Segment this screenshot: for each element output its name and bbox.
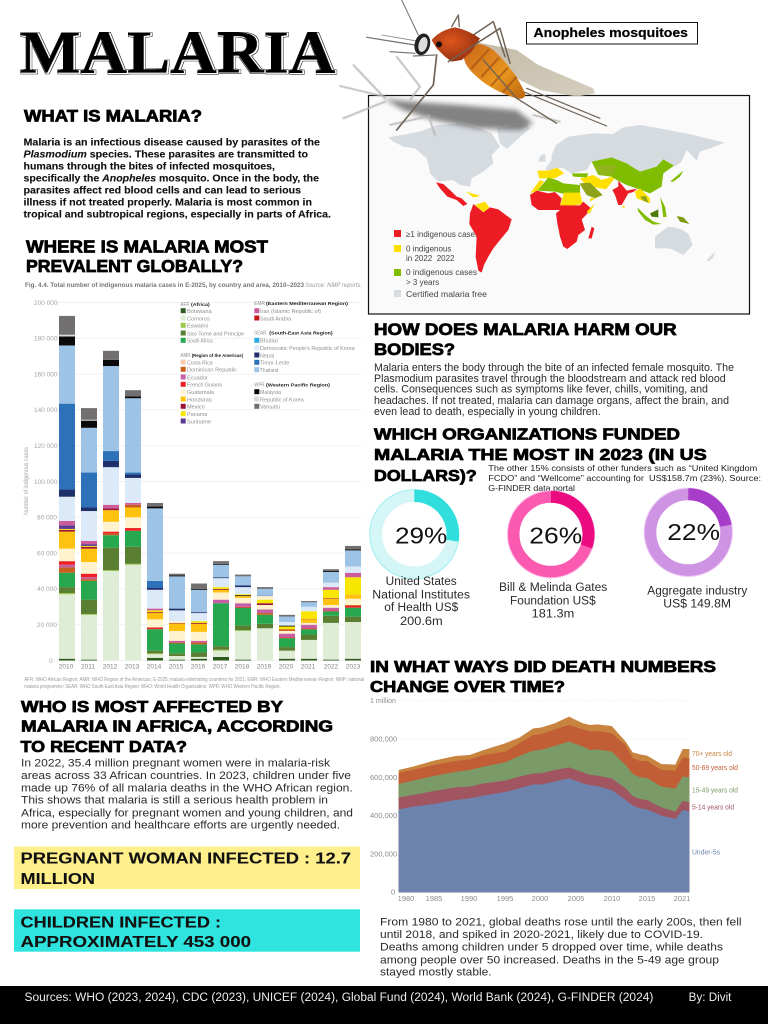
x axis years: 2012	[103, 664, 118, 670]
heading: who is most affected: WHO IS MOST AFFECTED BY	[21, 699, 283, 716]
legend: Africa: Comoros	[187, 316, 210, 322]
chart footnote: AFR: WHO African Region; AMR: WHO Region of the Americas; E-2025: malaria eliminating countries for 2021; EMR: WHO Eastern Mediterranean Region; NMP: national	[24, 677, 364, 683]
map legend	[394, 230, 488, 299]
y axis labels	[23, 300, 58, 665]
icon: mosquito	[340, 0, 607, 135]
text block: malaria definition: specifically the Anopheles mosquito. Once in the body, the	[24, 174, 319, 184]
legend: South-East Asia: SEAR	[254, 331, 266, 337]
x axis labels: 2015	[639, 894, 655, 903]
heading: how malaria harms	[374, 321, 677, 359]
mosquito legs and antennae	[367, 0, 607, 130]
x axis labels: 1985	[426, 894, 442, 903]
text block: malaria definition: illness if not treated properly. Malaria is most common in	[24, 198, 312, 208]
text block: Africa data: This shows that malaria is still a serious health problem in	[21, 795, 328, 807]
legend: South-East Asia: Democratic People's Republic of Korea	[260, 346, 355, 352]
legend: Eastern Mediterranean: (Eastern Mediterranean Region)	[266, 301, 349, 306]
legend: Eastern Mediterranean: Saudi Arabia	[260, 316, 292, 322]
legend: Africa: Eswatini	[187, 324, 208, 330]
x axis years: 2023	[346, 664, 361, 670]
callout: pregnant women infected: PREGNANT WOMAN INFECTED : 12.7	[20, 850, 351, 867]
legend: Americas: Suriname	[187, 419, 211, 425]
text block: malaria definition: Malaria is an infectious disease caused by parasites of the	[24, 138, 320, 148]
heading: what is malaria: WHAT IS MALARIA?	[24, 108, 202, 126]
area chart: deaths by age	[370, 696, 738, 903]
legend: Africa: (Africa)	[191, 302, 210, 307]
text block: Africa data: Africa, especially for pregnant women and young children, and	[21, 807, 353, 819]
callout: children infected: APPROXIMATELY 453 000	[20, 934, 251, 951]
text block: malaria definition: Plasmodium species. These parasites are transmitted to	[24, 150, 308, 160]
legend: Americas: French Guiana	[187, 383, 223, 389]
text block: deaths summary	[380, 917, 742, 978]
legend: South-East Asia: Nepal	[260, 353, 274, 359]
map legend: Certified malaria free	[406, 290, 488, 299]
y axis labels: 0	[391, 888, 395, 896]
y axis labels: 160 000	[34, 371, 58, 378]
legend: Americas	[180, 353, 244, 425]
x axis years: 2020	[279, 664, 294, 670]
title: MALARIA	[20, 20, 336, 86]
x axis labels	[398, 894, 690, 903]
label: industry: US$ 149.8M	[663, 599, 731, 611]
map legend: ≥1 indigenous cases	[406, 230, 479, 239]
series labels	[692, 749, 738, 856]
x axis labels: 1990	[461, 894, 477, 903]
mosquito shadow	[340, 57, 560, 135]
x axis years: 2015	[169, 664, 184, 670]
heading: who is most affected: MALARIA IN AFRICA, ACCORDING	[21, 719, 333, 736]
text block: Africa data: areas across 33 African countries. In 2023, children under five	[21, 770, 351, 782]
legend: South-East Asia: Bhutan	[260, 339, 278, 345]
label: NIH: United States	[386, 576, 457, 588]
y axis labels: Number of indigenous cases	[23, 446, 30, 515]
heading: funding: WHICH ORGANIZATIONS FUNDED	[374, 427, 680, 444]
map legend: in 2022 2022	[406, 254, 455, 263]
y axis labels: 120 000	[34, 443, 58, 450]
chart footnote: malaria programme; SEAR: WHO South-East Asia Region; WHO: World Health Organization; WPR: WHO Western Pacific Region.	[24, 684, 281, 690]
text block: deaths summary: until 2018, and spiked in 2020-2021, likely due to COVID-19.	[380, 929, 703, 941]
funding note: G-FINDER data portal	[488, 484, 575, 493]
x axis labels: 1995	[497, 894, 513, 903]
area: 70+	[399, 717, 689, 892]
y axis labels: 80 000	[37, 515, 57, 522]
legend: Eastern Mediterranean	[254, 301, 349, 322]
legend: South-East Asia: Timor-Leste	[260, 361, 289, 367]
y axis labels: 60 000	[37, 550, 57, 557]
legend: Americas: Honduras	[187, 397, 212, 403]
donut: NIH 29%	[370, 490, 459, 579]
text block: Africa data	[21, 758, 353, 832]
section: funding organizations	[370, 427, 761, 628]
map: malaria free land, Eurasia	[538, 125, 725, 255]
heading: who is most affected: TO RECENT DATA?	[20, 739, 187, 756]
legend: Americas: (Region of the Americas)	[192, 353, 244, 358]
label: Gates: Bill & Melinda Gates	[499, 582, 608, 594]
donut: industry 22%	[644, 488, 732, 576]
y axis labels: 100 000	[34, 479, 58, 486]
legend: Western Pacific: Vanuatu	[260, 405, 280, 411]
area: 50-69	[399, 725, 689, 892]
text block: harm explanation: Plasmodium parasites travel through the bloodstream and attack red blood	[374, 373, 726, 385]
map legend: > 3 years	[406, 278, 439, 287]
y axis labels: 140 000	[34, 407, 58, 414]
footer	[0, 986, 768, 1024]
x axis years: 2021	[301, 664, 316, 670]
legend: South-East Asia: (South-East Asia Region)	[269, 331, 333, 336]
text block: Africa data: In 2022, 35.4 million pregnant women were in malaria-risk	[21, 758, 331, 770]
donut: Gates 26%	[507, 491, 595, 578]
y axis labels: 20 000	[37, 622, 57, 629]
text block: malaria definition: parasites affect red blood cells and can lead to serious	[24, 186, 301, 196]
y axis labels: 180 000	[34, 336, 58, 343]
legend: Americas: Guatemala	[187, 390, 215, 396]
text block: Africa data: more prevention and healthcare efforts are urgently needed.	[21, 820, 340, 832]
series labels: 15-49 years old	[692, 786, 738, 794]
callout: children infected: CHILDREN INFECTED :	[20, 914, 221, 931]
text block: harm explanation: headaches. If not treated, malaria can damage organs, affect the brain, and	[374, 395, 729, 407]
stacked bars	[59, 316, 361, 660]
x axis labels: 2010	[604, 894, 620, 903]
map: malaria free land, Americas and Oceania	[388, 123, 715, 262]
heading: who is most affected	[20, 699, 333, 756]
legend: Americas: Costa Rica	[187, 360, 213, 366]
legend: Americas: Ecuador	[187, 375, 208, 381]
text block: deaths summary: among people over 50 increased. Deaths in the 5-49 age group	[380, 954, 719, 966]
legend: Africa: Sao Tome and Principe	[187, 331, 244, 337]
y axis labels: 400,000	[370, 811, 397, 820]
panel: world map	[368, 96, 750, 314]
chart caption: Source: NMP reports.	[305, 282, 362, 289]
chart legend	[180, 301, 355, 425]
label: Gates: Foundation US$	[510, 595, 596, 607]
funding note	[488, 464, 761, 493]
label: NIH: 200.6m	[400, 616, 443, 628]
callout: children infected	[14, 909, 360, 952]
chart footnote	[24, 677, 364, 690]
heading: funding: DOLLARS)?	[374, 468, 477, 485]
heading: funding	[374, 427, 707, 485]
series labels: 50-69 years old	[692, 763, 738, 772]
x axis years: 2022	[324, 664, 339, 670]
legend: Eastern Mediterranean: EMR	[254, 301, 265, 307]
x axis years: 2016	[191, 664, 206, 670]
donut: NIH 29%: 29%	[395, 522, 447, 548]
heading: death numbers over time: IN WHAT WAYS DID DEATH NUMBERS	[370, 659, 716, 676]
legend: Western Pacific: Malaysia	[260, 390, 282, 396]
section: what is malaria	[24, 108, 331, 220]
y axis labels: 0	[49, 658, 53, 665]
y axis labels: 1 million	[370, 696, 396, 705]
text block: malaria definition: humans through the bites of infected mosquitoes,	[24, 162, 275, 172]
y axis labels	[370, 696, 397, 896]
area: 15-49	[399, 742, 689, 892]
callout: pregnant women infected: MILLION	[20, 871, 95, 888]
text block: harm explanation: cells. Consequences such as symptoms like fever, chills, vomiting, and	[374, 384, 708, 396]
callout: pregnant women infected	[14, 847, 360, 889]
area: under 5	[399, 778, 689, 892]
text block: harm explanation	[374, 362, 734, 418]
y axis labels: 40 000	[37, 586, 57, 593]
heading: death numbers over time	[370, 659, 716, 696]
funding note: FCDO” and “Wellcome” accounting for US$158.7m (23%). Source:	[488, 474, 761, 483]
author: By: Divit	[689, 992, 732, 1004]
label: NIH: National Institutes	[372, 589, 470, 601]
area: 5-14	[399, 767, 689, 892]
heading: where is malaria most prevalent	[26, 236, 268, 276]
series labels: 5-14 years old	[692, 802, 734, 812]
text block: deaths summary: Deaths among children under 5 dropped over time, while deaths	[380, 942, 724, 954]
sources: Sources: WHO (2023, 2024), CDC (2023), UNICEF (2024), Global Fund (2024), World Bank (2024), G-FINDER (2024)	[24, 992, 654, 1004]
text block: Africa data: made up 76% of all malaria deaths in the WHO African region.	[21, 783, 353, 795]
map: Africa and Asia malaria regions	[530, 157, 689, 249]
donut: industry 22%: 22%	[667, 519, 720, 545]
legend: Africa: AFR	[180, 302, 190, 308]
text block: malaria definition	[24, 138, 331, 220]
heading: funding: MALARIA THE MOST IN 2023 (IN US	[374, 447, 707, 464]
label: industry	[647, 585, 748, 611]
x axis years: 2013	[125, 664, 140, 670]
x axis years: 2019	[257, 664, 272, 670]
x axis years: 2011	[81, 664, 95, 670]
legend: Western Pacific: WPR	[254, 382, 264, 388]
x axis years	[59, 664, 361, 670]
legend: Americas: Mexico	[187, 405, 205, 411]
section: who is most affected	[20, 699, 353, 832]
legend: Western Pacific: Republic of Korea	[260, 397, 304, 403]
series labels: 70+ years old	[692, 749, 732, 758]
y axis labels: 200,000	[370, 850, 397, 858]
map: Americas malaria regions	[436, 182, 512, 273]
heading: how malaria harms: BODIES?	[374, 341, 455, 359]
legend: South-East Asia	[254, 331, 355, 374]
y axis labels: 600,000	[370, 773, 397, 782]
legend: Western Pacific: (Western Pacific Region)	[266, 382, 331, 387]
text block: harm explanation: Malaria enters the body through the bite of an infected female mosquito. The	[374, 362, 734, 374]
x axis labels: 1980	[398, 894, 414, 903]
heading: how malaria harms: HOW DOES MALARIA HARM OUR	[374, 321, 677, 339]
legend: Americas: AMR	[180, 353, 190, 359]
x axis years: 2014	[147, 664, 162, 670]
heading: where is malaria most prevalent: WHERE IS MALARIA MOST	[26, 236, 268, 256]
bar chart: indigenous malaria cases by year	[23, 300, 362, 670]
label: Anopheles mosquitoes: Anopheles mosquitoes	[534, 26, 688, 40]
label: Anopheles mosquitoes	[526, 22, 698, 44]
label: NIH	[372, 576, 470, 628]
label: Gates: 181.3m	[532, 608, 574, 620]
heading: where is malaria most prevalent: PREVALENT GLOBALLY?	[26, 256, 243, 276]
heading: death numbers over time: CHANGE OVER TIME?	[370, 679, 565, 696]
text block: malaria definition: tropical and subtropical regions, especially in parts of Africa.	[24, 210, 331, 220]
text block: deaths summary: From 1980 to 2021, global deaths rose until the early 200s, then fell	[380, 917, 742, 929]
series labels: Under-5s	[692, 848, 720, 856]
mosquito legs over body	[448, 28, 517, 98]
label: NIH: of Health US$	[384, 602, 459, 614]
mosquito wings	[473, 42, 595, 97]
legend: South-East Asia: Thailand	[260, 368, 278, 374]
mosquito eye ring	[412, 32, 433, 57]
legend: Americas: Dominican Republic	[187, 368, 237, 374]
map legend: 0 indigenous cases	[406, 268, 477, 277]
funding note: The other 15% consists of other funders such as “United Kingdom	[488, 464, 758, 473]
x axis labels: 2021	[674, 894, 690, 903]
donut: Gates 26%: 26%	[529, 522, 582, 548]
section: how does malaria harm	[374, 321, 734, 418]
label: industry: Aggregate industry	[647, 585, 748, 597]
mosquito abdomen	[463, 44, 526, 99]
legend: Africa: Botswana	[187, 309, 212, 315]
x axis labels: 2000	[532, 894, 548, 903]
mosquito thorax	[432, 27, 480, 62]
text block: harm explanation: even lead to death, especially in young children.	[374, 406, 601, 418]
legend: Eastern Mediterranean: Iran (Islamic Republic of)	[260, 309, 321, 315]
x axis years: 2018	[235, 664, 250, 670]
legend: Western Pacific	[254, 382, 331, 411]
label: Gates	[499, 582, 608, 620]
x axis years: 2017	[213, 664, 228, 670]
text block: deaths summary: stayed mostly stable.	[380, 966, 492, 978]
legend: Africa	[180, 302, 244, 345]
map legend: 0 indigenous	[406, 244, 451, 254]
x axis labels: 2005	[568, 894, 584, 903]
y axis labels: 200 000	[34, 300, 58, 307]
chart caption: Fig. 4.4. Total number of indigenous malaria cases in E-2025, by country and area, 2010–2023	[25, 282, 304, 289]
y axis labels: 800,000	[370, 734, 397, 744]
x axis years: 2010	[59, 664, 74, 670]
legend: Americas: Panama	[187, 412, 208, 418]
legend: Africa: South Africa	[187, 339, 213, 345]
